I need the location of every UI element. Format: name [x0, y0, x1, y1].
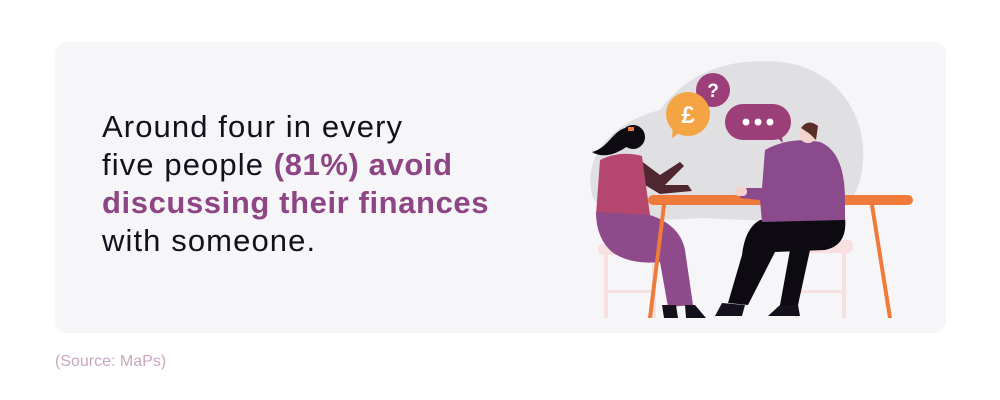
background blob — [590, 61, 863, 222]
table — [648, 195, 913, 318]
icon: pound speech bubble: ? — [707, 81, 719, 102]
text block: headline statistic: five people (81%) avoid — [102, 147, 453, 182]
source note: (Source: MaPs) — [55, 353, 166, 370]
text block: headline statistic: discussing their finances — [102, 185, 489, 220]
woman — [592, 125, 706, 318]
text block: headline statistic: Around four in every — [102, 109, 403, 144]
man — [715, 122, 845, 316]
icon: ellipsis speech bubble — [725, 104, 791, 143]
text block: headline statistic: with someone. — [102, 223, 316, 258]
stools — [598, 240, 853, 318]
panel: card — [55, 42, 946, 333]
icon: pound speech bubble — [666, 73, 730, 138]
text block: headline statistic — [102, 109, 489, 258]
icon: pound speech bubble: £ — [681, 102, 695, 129]
